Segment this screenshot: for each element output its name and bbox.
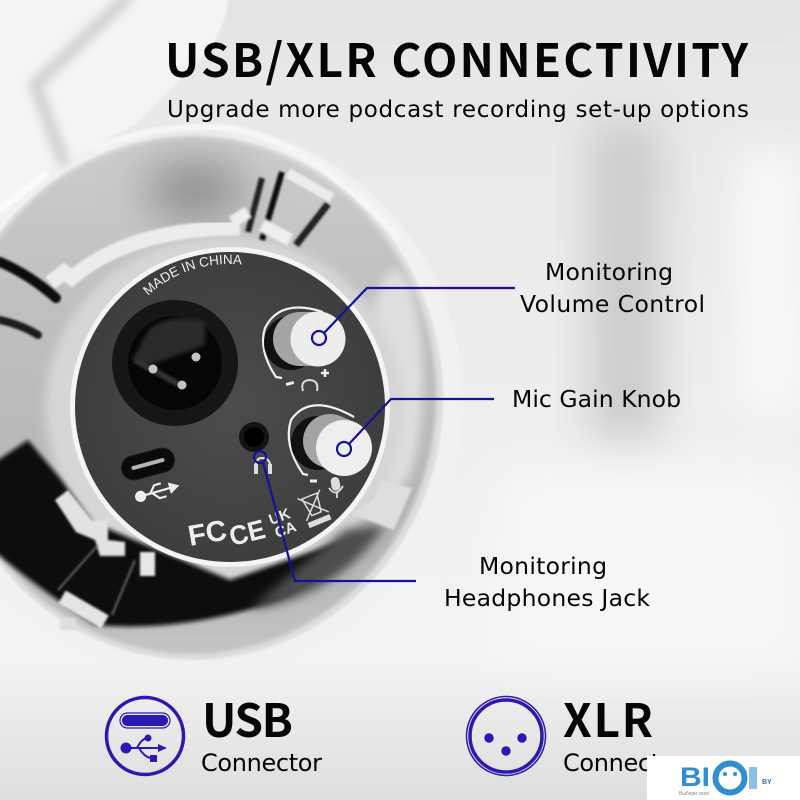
callout: monitoring headphones jack bbox=[254, 451, 650, 612]
watermark logo: BY bbox=[762, 779, 772, 786]
right side light reflection bbox=[367, 270, 423, 490]
gain knob bbox=[289, 405, 372, 476]
XLR socket bbox=[112, 300, 238, 426]
callout label bbox=[444, 552, 650, 612]
label: USB bbox=[202, 685, 293, 751]
microphone photo bbox=[0, 0, 463, 679]
logo G bbox=[716, 764, 744, 792]
made in china label: MADE IN CHINA bbox=[142, 254, 242, 296]
label: XLR bbox=[563, 685, 653, 751]
certification marks: CA bbox=[273, 518, 299, 542]
callout line bbox=[254, 451, 416, 581]
callout label bbox=[520, 258, 705, 318]
control disc bbox=[70, 247, 390, 567]
icon: USB bbox=[106, 698, 184, 774]
shock mount band bbox=[50, 228, 240, 283]
certification marks: CE bbox=[226, 514, 268, 552]
shock mount halo bbox=[45, 236, 405, 580]
white arm bbox=[0, 0, 228, 212]
certification marks: FC bbox=[186, 515, 229, 553]
callout: mic gain knob bbox=[337, 385, 681, 456]
callout label: Volume Control bbox=[520, 290, 705, 318]
mic icon bbox=[310, 477, 343, 498]
inner cavity bbox=[0, 138, 436, 654]
icon: XLR bbox=[466, 696, 546, 776]
headphone jack icon bbox=[256, 458, 270, 474]
lower left shock mount clips bbox=[55, 490, 155, 630]
headphone jack bbox=[239, 422, 269, 452]
watermark logo: Выбери своё bbox=[679, 791, 709, 797]
sublabel: Connector bbox=[201, 749, 322, 777]
watermark logo: BI bbox=[680, 762, 710, 792]
callout line bbox=[337, 399, 494, 456]
ring inner edge bbox=[0, 136, 443, 660]
callout label: Mic Gain Knob bbox=[512, 385, 681, 413]
callout label: Monitoring bbox=[545, 258, 673, 286]
certification marks: UK bbox=[267, 505, 293, 529]
sublabel: Connector bbox=[563, 749, 684, 777]
XLR connector badge bbox=[466, 685, 684, 777]
watermark logo bbox=[647, 756, 800, 800]
right clip bbox=[352, 480, 412, 530]
top rim highlight bbox=[95, 127, 400, 240]
USB connector badge bbox=[106, 685, 322, 777]
callout: monitoring volume control bbox=[312, 258, 705, 345]
white outer ring of microphone body bbox=[0, 125, 463, 679]
title: USB/XLR CONNECTIVITY bbox=[165, 25, 748, 91]
shock mount clips bbox=[232, 172, 332, 245]
USB-C port bbox=[119, 445, 177, 483]
callout line bbox=[312, 288, 515, 345]
callout label: Headphones Jack bbox=[444, 584, 650, 612]
lower cavity fade bbox=[250, 525, 385, 610]
certification marks bbox=[186, 505, 299, 553]
cavity shadow bbox=[145, 160, 245, 220]
WEEE icon bbox=[298, 490, 331, 527]
volume icons bbox=[286, 369, 329, 391]
dark inside of microphone bbox=[0, 440, 345, 627]
callout label: Monitoring bbox=[479, 552, 607, 580]
volume knob bbox=[263, 308, 346, 378]
subtitle: Upgrade more podcast recording set-up options bbox=[167, 97, 749, 123]
arm shadow band bbox=[35, 0, 130, 165]
USB symbol on disc bbox=[134, 479, 179, 504]
black wires on left bbox=[0, 262, 56, 335]
